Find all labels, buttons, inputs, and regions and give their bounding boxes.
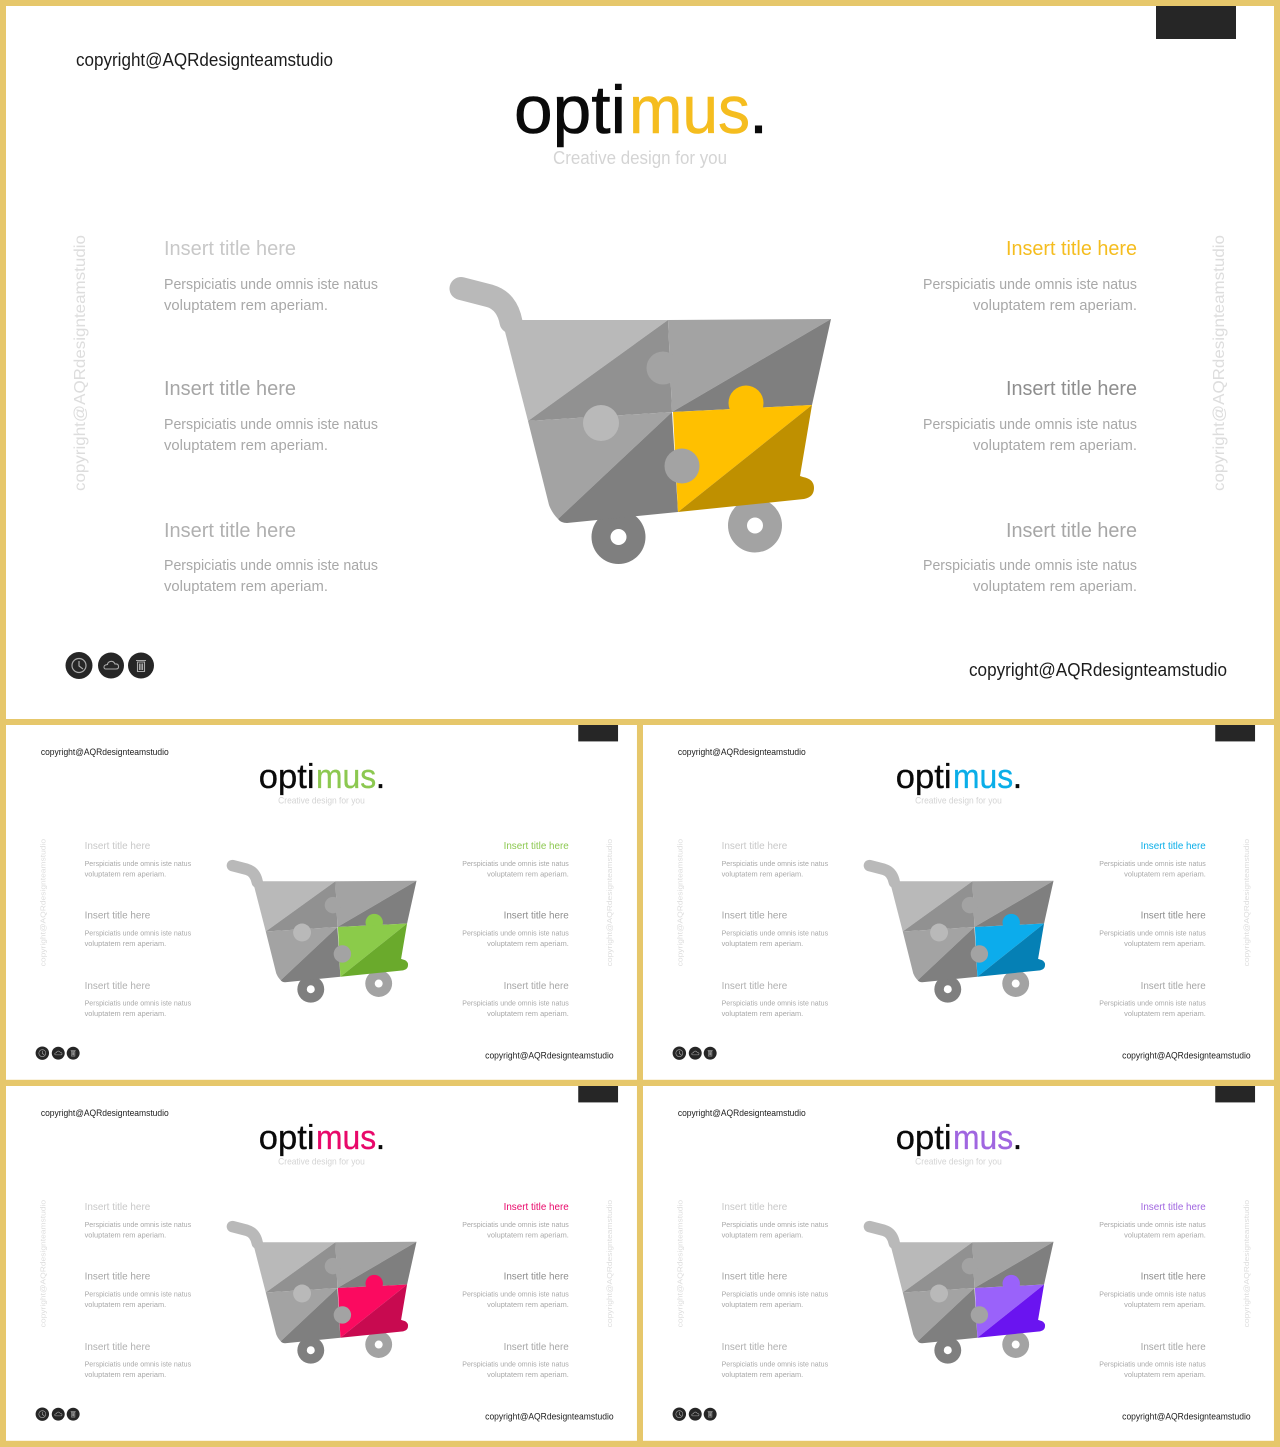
icon row: clock, cloud, trash: [36, 1046, 80, 1060]
text block: left 1: voluptatem rem aperiam.: [722, 869, 803, 878]
text block: right 2: Perspiciatis unde omnis iste natus: [1099, 1289, 1206, 1298]
text block: right 1: [462, 841, 569, 878]
text block: right 3: [462, 981, 569, 1018]
text block: right 2: Perspiciatis unde omnis iste natus: [923, 417, 1137, 433]
text block: left 2: [722, 1272, 828, 1309]
text block: right 1: Perspiciatis unde omnis iste natus: [1099, 859, 1206, 868]
vertical copyright right: copyright@AQRdesignteamstudio: [1242, 1200, 1251, 1327]
text block: right 1: [462, 1202, 569, 1239]
tagline: Creative design for you: [278, 796, 365, 806]
logo title: opti: [259, 1119, 315, 1157]
icon: shopping cart puzzle: [232, 866, 417, 1003]
text block: right 2: Perspiciatis unde omnis iste natus: [462, 1289, 569, 1298]
text block: left 1: voluptatem rem aperiam.: [164, 298, 328, 314]
text block: left 1: Insert title here: [85, 841, 151, 852]
icon row: clock, cloud, trash: [673, 1407, 717, 1421]
panel: small slide, pink: [6, 1086, 637, 1441]
text block: left 2: voluptatem rem aperiam.: [722, 1300, 803, 1309]
text block: left 3: Insert title here: [85, 981, 151, 992]
text block: right 3: Insert title here: [504, 981, 569, 992]
text block: left 1: Perspiciatis unde omnis iste natus: [85, 859, 191, 868]
text block: left 2: Perspiciatis unde omnis iste natus: [722, 928, 828, 937]
icon row: clock, cloud, trash: [66, 652, 154, 679]
copyright bottom: copyright@AQRdesignteamstudio: [1122, 1050, 1251, 1060]
copyright top: copyright@AQRdesignteamstudio: [678, 747, 806, 757]
text block: right 3: voluptatem rem aperiam.: [1124, 1009, 1206, 1018]
text block: right 3: [462, 1342, 569, 1379]
text block: right 3: Perspiciatis unde omnis iste natus: [1099, 1360, 1206, 1369]
text block: right 1: [1099, 1202, 1206, 1239]
text block: left 3: Insert title here: [85, 1342, 151, 1353]
logo title: opti: [896, 1119, 952, 1157]
text block: left 1: [85, 1202, 191, 1239]
text block: left 3: Perspiciatis unde omnis iste natus: [85, 999, 191, 1008]
text block: left 3: voluptatem rem aperiam.: [85, 1370, 166, 1379]
text block: right 1: Perspiciatis unde omnis iste natus: [1099, 1220, 1206, 1229]
text block: right 3: [1099, 1342, 1206, 1379]
text block: left 3: [85, 1342, 191, 1379]
text block: right 1: Perspiciatis unde omnis iste natus: [923, 277, 1137, 293]
vertical copyright left: copyright@AQRdesignteamstudio: [675, 839, 684, 966]
text block: right 2: [1099, 911, 1206, 948]
copyright bottom: copyright@AQRdesignteamstudio: [485, 1050, 614, 1060]
text block: right 3: [1099, 981, 1206, 1018]
text block: left 2: voluptatem rem aperiam.: [164, 438, 328, 454]
vertical copyright right: copyright@AQRdesignteamstudio: [1242, 839, 1251, 966]
text block: left 2: voluptatem rem aperiam.: [85, 1300, 166, 1309]
text block: right 2: Perspiciatis unde omnis iste natus: [462, 928, 569, 937]
text block: right 3: voluptatem rem aperiam.: [487, 1370, 569, 1379]
panel: small slide, green: [6, 725, 637, 1080]
text block: left 1: voluptatem rem aperiam.: [85, 869, 166, 878]
panel: main slide, yellow: [6, 6, 1274, 719]
copyright top: copyright@AQRdesignteamstudio: [41, 747, 169, 757]
logo title: [259, 1119, 385, 1157]
text block: left 3: voluptatem rem aperiam.: [722, 1370, 803, 1379]
icon: shopping cart puzzle: [869, 866, 1054, 1003]
text block: left 2: Insert title here: [164, 378, 296, 400]
text block: right 1: Insert title here: [1141, 1202, 1206, 1213]
black tab: [578, 725, 618, 741]
text block: left 1: [85, 841, 191, 878]
icon: shopping cart puzzle: [461, 288, 831, 564]
text block: right 2: [923, 378, 1137, 454]
text block: left 3: Perspiciatis unde omnis iste natus: [722, 1360, 828, 1369]
text block: right 2: Insert title here: [504, 1272, 569, 1283]
text block: right 1: Insert title here: [504, 1202, 569, 1213]
text block: right 3: Perspiciatis unde omnis iste natus: [1099, 999, 1206, 1008]
text block: right 2: Insert title here: [504, 911, 569, 922]
logo title: [896, 758, 1022, 796]
text block: left 3: [85, 981, 191, 1018]
text block: right 1: Insert title here: [1006, 238, 1137, 260]
text block: right 1: voluptatem rem aperiam.: [1124, 1230, 1206, 1239]
icon row: clock, cloud, trash: [673, 1046, 717, 1060]
text block: left 3: voluptatem rem aperiam.: [164, 579, 328, 595]
text block: right 1: voluptatem rem aperiam.: [973, 298, 1137, 314]
text block: left 3: Perspiciatis unde omnis iste natus: [722, 999, 828, 1008]
vertical copyright left: copyright@AQRdesignteamstudio: [675, 1200, 684, 1327]
logo title: [259, 758, 385, 796]
text block: right 1: [1099, 841, 1206, 878]
text block: left 2: Insert title here: [85, 1272, 151, 1283]
text block: left 1: Insert title here: [722, 841, 788, 852]
text block: left 2: voluptatem rem aperiam.: [85, 939, 166, 948]
black tab: [1156, 6, 1236, 39]
logo title: [514, 72, 768, 148]
text block: right 1: Insert title here: [1141, 841, 1206, 852]
text block: left 2: [164, 378, 378, 454]
text block: left 3: Perspiciatis unde omnis iste natus: [164, 558, 378, 574]
copyright bottom: copyright@AQRdesignteamstudio: [1122, 1411, 1251, 1421]
copyright top: copyright@AQRdesignteamstudio: [76, 49, 333, 70]
text block: left 2: [722, 911, 828, 948]
panel: small slide, purple: [643, 1086, 1274, 1441]
logo title: .: [376, 758, 385, 796]
vertical copyright right: copyright@AQRdesignteamstudio: [1211, 235, 1228, 491]
text block: right 3: Insert title here: [1006, 520, 1137, 542]
panel: small slide, blue: [643, 725, 1274, 1080]
text block: left 2: Insert title here: [722, 911, 788, 922]
text block: left 2: Perspiciatis unde omnis iste natus: [164, 417, 378, 433]
logo title: .: [1013, 758, 1022, 796]
text block: right 3: Perspiciatis unde omnis iste natus: [462, 1360, 569, 1369]
text block: right 1: voluptatem rem aperiam.: [1124, 869, 1206, 878]
logo title: [896, 1119, 1022, 1157]
text block: right 3: [923, 520, 1137, 595]
text block: left 1: voluptatem rem aperiam.: [85, 1230, 166, 1239]
logo title: opti: [259, 758, 315, 796]
text block: left 2: Perspiciatis unde omnis iste natus: [85, 1289, 191, 1298]
text block: left 1: Insert title here: [85, 1202, 151, 1213]
text block: left 2: Insert title here: [85, 911, 151, 922]
text block: right 2: Insert title here: [1006, 378, 1137, 400]
text block: left 1: [164, 238, 378, 314]
logo title: mus: [953, 758, 1013, 796]
text block: right 2: voluptatem rem aperiam.: [487, 1300, 569, 1309]
logo title: opti: [514, 72, 626, 148]
tagline: Creative design for you: [278, 1157, 365, 1167]
text block: left 2: [85, 911, 191, 948]
text block: right 2: [462, 911, 569, 948]
text block: right 2: [462, 1272, 569, 1309]
text block: right 3: voluptatem rem aperiam.: [487, 1009, 569, 1018]
black tab: [578, 1086, 618, 1102]
text block: left 1: Perspiciatis unde omnis iste natus: [164, 277, 378, 293]
text block: left 1: voluptatem rem aperiam.: [722, 1230, 803, 1239]
text block: left 3: Insert title here: [164, 520, 296, 542]
text block: left 3: [722, 981, 828, 1018]
vertical copyright left: copyright@AQRdesignteamstudio: [38, 839, 47, 966]
text block: right 2: voluptatem rem aperiam.: [487, 939, 569, 948]
text block: left 1: [722, 841, 828, 878]
text block: left 1: Insert title here: [164, 238, 296, 260]
text block: left 1: [722, 1202, 828, 1239]
text block: right 3: voluptatem rem aperiam.: [973, 579, 1137, 595]
vertical copyright right: copyright@AQRdesignteamstudio: [605, 1200, 614, 1327]
vertical copyright left: copyright@AQRdesignteamstudio: [38, 1200, 47, 1327]
icon row: clock, cloud, trash: [36, 1407, 80, 1421]
logo title: .: [376, 1119, 385, 1157]
copyright bottom: copyright@AQRdesignteamstudio: [969, 659, 1227, 680]
text block: right 1: Perspiciatis unde omnis iste natus: [462, 1220, 569, 1229]
text block: left 1: Perspiciatis unde omnis iste natus: [722, 859, 828, 868]
text block: right 3: Insert title here: [1141, 981, 1206, 992]
logo title: .: [1013, 1119, 1022, 1157]
text block: right 3: Perspiciatis unde omnis iste natus: [462, 999, 569, 1008]
text block: left 1: Insert title here: [722, 1202, 788, 1213]
black tab: [1215, 725, 1255, 741]
vertical copyright right: copyright@AQRdesignteamstudio: [605, 839, 614, 966]
text block: right 1: [923, 238, 1137, 314]
text block: right 1: voluptatem rem aperiam.: [487, 869, 569, 878]
tagline: Creative design for you: [915, 1157, 1002, 1167]
text block: left 3: voluptatem rem aperiam.: [722, 1009, 803, 1018]
text block: right 2: voluptatem rem aperiam.: [973, 438, 1137, 454]
text block: right 3: Insert title here: [1141, 1342, 1206, 1353]
text block: right 2: Insert title here: [1141, 1272, 1206, 1283]
tagline: Creative design for you: [915, 796, 1002, 806]
copyright bottom: copyright@AQRdesignteamstudio: [485, 1411, 614, 1421]
text block: left 2: Insert title here: [722, 1272, 788, 1283]
text block: right 3: voluptatem rem aperiam.: [1124, 1370, 1206, 1379]
text block: right 3: Perspiciatis unde omnis iste natus: [923, 558, 1137, 574]
logo title: mus: [629, 72, 750, 148]
logo title: opti: [896, 758, 952, 796]
text block: right 1: Perspiciatis unde omnis iste natus: [462, 859, 569, 868]
text block: left 3: Insert title here: [722, 981, 788, 992]
text block: right 3: Insert title here: [504, 1342, 569, 1353]
logo title: .: [749, 72, 768, 148]
vertical copyright left: copyright@AQRdesignteamstudio: [72, 235, 89, 491]
text block: right 2: voluptatem rem aperiam.: [1124, 1300, 1206, 1309]
text block: left 3: Perspiciatis unde omnis iste natus: [85, 1360, 191, 1369]
text block: right 2: Perspiciatis unde omnis iste natus: [1099, 928, 1206, 937]
logo title: mus: [316, 1119, 376, 1157]
text block: left 1: Perspiciatis unde omnis iste natus: [85, 1220, 191, 1229]
text block: right 2: [1099, 1272, 1206, 1309]
tagline: Creative design for you: [553, 148, 727, 168]
logo title: mus: [953, 1119, 1013, 1157]
text block: right 1: Insert title here: [504, 841, 569, 852]
text block: right 1: voluptatem rem aperiam.: [487, 1230, 569, 1239]
text block: left 2: [85, 1272, 191, 1309]
icon: shopping cart puzzle: [869, 1227, 1054, 1364]
copyright top: copyright@AQRdesignteamstudio: [41, 1108, 169, 1118]
text block: right 2: voluptatem rem aperiam.: [1124, 939, 1206, 948]
text block: left 3: [722, 1342, 828, 1379]
text block: right 2: Insert title here: [1141, 911, 1206, 922]
text block: left 1: Perspiciatis unde omnis iste natus: [722, 1220, 828, 1229]
text block: left 2: Perspiciatis unde omnis iste natus: [85, 928, 191, 937]
icon: shopping cart puzzle: [232, 1227, 417, 1364]
text block: left 3: voluptatem rem aperiam.: [85, 1009, 166, 1018]
text block: left 2: Perspiciatis unde omnis iste natus: [722, 1289, 828, 1298]
black tab: [1215, 1086, 1255, 1102]
copyright top: copyright@AQRdesignteamstudio: [678, 1108, 806, 1118]
text block: left 3: [164, 520, 378, 595]
text block: left 2: voluptatem rem aperiam.: [722, 939, 803, 948]
logo title: mus: [316, 758, 376, 796]
text block: left 3: Insert title here: [722, 1342, 788, 1353]
